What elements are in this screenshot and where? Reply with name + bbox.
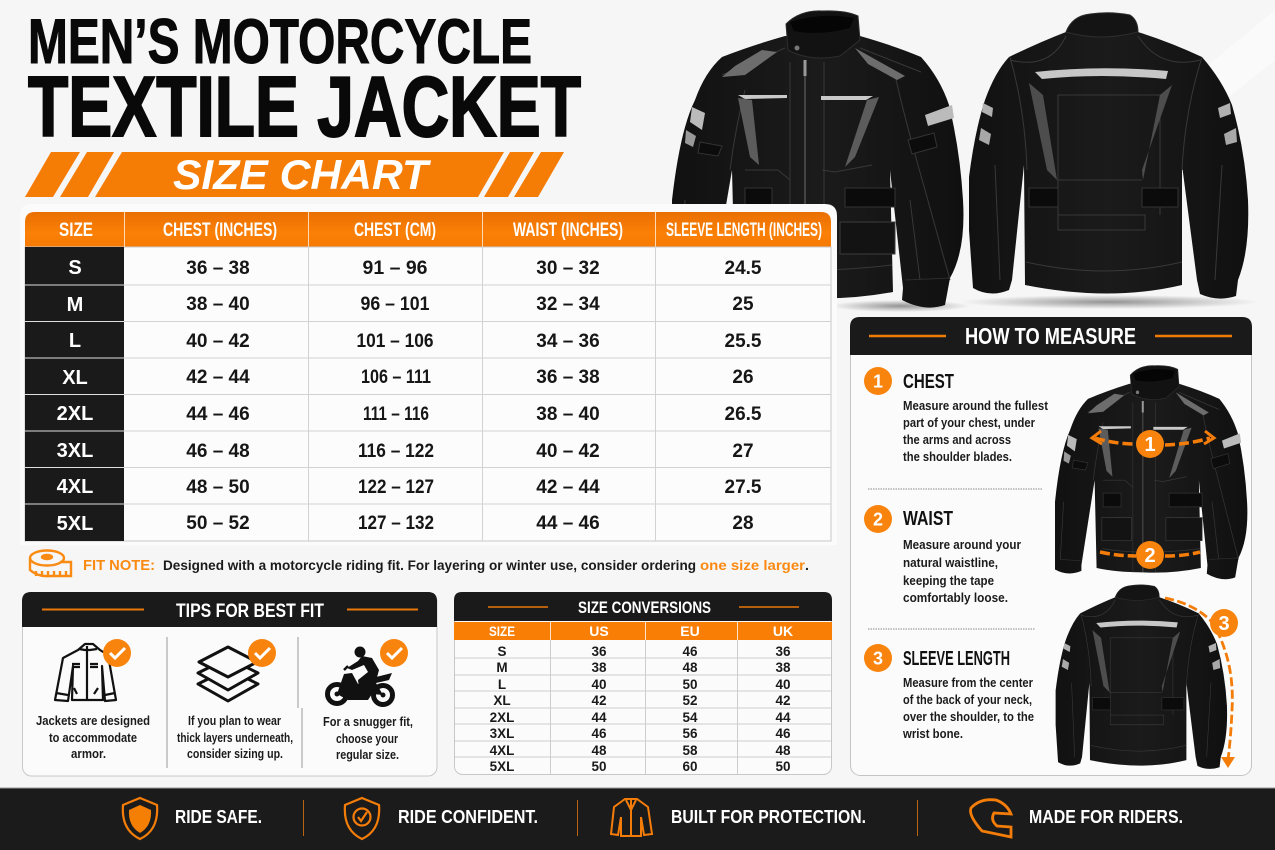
title: MEN’S MOTORCYCLE [28, 7, 532, 77]
conversions rows: 48 [775, 743, 791, 758]
conversions rows: 48 [591, 743, 607, 758]
table rows: 40 – 42 [186, 331, 250, 352]
conversions rows: 60 [682, 759, 698, 774]
table rows: M [67, 294, 83, 316]
icon: jacket [611, 799, 652, 836]
fit note: . [805, 557, 809, 573]
table rows: 2XL [57, 403, 93, 425]
table rows: 38 – 40 [186, 294, 250, 315]
step 1: chest: the shoulder blades. [903, 450, 1012, 464]
table rows: 91 – 96 [362, 258, 428, 279]
arrow: sleeve measurement [1165, 598, 1238, 768]
table rows: 127 – 132 [358, 513, 434, 534]
conversions rows: 46 [775, 726, 791, 741]
photo: jacket front [672, 11, 963, 308]
conversions rows: XL [493, 693, 511, 708]
table rows: 116 – 122 [358, 441, 434, 462]
panel: tips for best fit [22, 592, 437, 776]
conversions rows: 46 [682, 644, 698, 659]
step 2: waist: 2 [873, 510, 883, 530]
conversions column headings: US [589, 623, 609, 639]
fit note: one size larger [700, 557, 806, 573]
tip texts [36, 714, 413, 762]
title: TEXTILE JACKET [28, 60, 581, 155]
conversions rows: 46 [591, 726, 607, 741]
tip texts: to accommodate [49, 731, 137, 745]
table rows: 36 – 38 [536, 367, 600, 388]
photo: small jacket front [1055, 366, 1247, 579]
table rows: 44 – 46 [536, 513, 600, 534]
table rows: 40 – 42 [536, 441, 600, 462]
fit note: FIT NOTE: [83, 557, 155, 574]
table rows: 44 – 46 [186, 404, 250, 425]
table rows: 32 – 34 [536, 294, 600, 315]
fit note: Designed with a motorcycle riding fit. For layering or winter use, consider ordering [163, 557, 696, 573]
conversions rows: M [496, 660, 508, 675]
table rows: S [68, 257, 82, 279]
step 2: waist: WAIST [903, 508, 953, 530]
arrow: chest measurement [1092, 430, 1214, 458]
step 3: sleeve length: SLEEVE LENGTH [903, 648, 1010, 670]
table rows: 122 – 127 [358, 477, 434, 498]
table header: SIZE [59, 220, 93, 241]
label: built for protection: BUILT FOR PROTECTION. [671, 807, 866, 827]
conversions rows: 58 [682, 743, 698, 758]
table header: WAIST (INCHES) [513, 220, 623, 241]
table rows: 34 – 36 [536, 331, 600, 352]
conversions column headings: EU [680, 623, 700, 639]
tip texts: For a snugger fit, [323, 715, 413, 729]
table header [25, 212, 831, 247]
tip texts: Jackets are designed [36, 714, 150, 728]
table rows: 26.5 [725, 404, 762, 425]
conversions rows: 4XL [490, 743, 514, 758]
table rows: 38 – 40 [536, 404, 600, 425]
table header: CHEST (INCHES) [163, 220, 277, 241]
title [28, 7, 581, 155]
step 3: sleeve length: over the shoulder, to the [903, 710, 1034, 724]
table rows: 4XL [57, 476, 93, 498]
conversions rows: 50 [682, 677, 698, 692]
table rows: 25.5 [725, 331, 762, 352]
step 3: sleeve length: 3 [873, 648, 883, 668]
table rows: 27.5 [725, 477, 762, 498]
step 3: sleeve length: Measure from the center [903, 676, 1033, 690]
step 2: waist: keeping the tape [903, 574, 994, 588]
conversions rows: S [497, 644, 507, 659]
icon: jacket outline [55, 644, 116, 701]
photo: small jacket back [1056, 585, 1227, 769]
table rows: 111 – 116 [363, 404, 429, 425]
conversions rows: 36 [775, 644, 791, 659]
table rows: L [69, 330, 81, 352]
banner: size chart: SIZE CHART [173, 151, 431, 198]
conversions column headings: SIZE [489, 623, 515, 639]
conversions rows: 54 [682, 710, 698, 725]
measure header: HOW TO MEASURE [965, 323, 1136, 349]
conversions rows: L [498, 677, 506, 692]
table rows: 26 [732, 367, 754, 388]
conversions rows: 50 [775, 759, 791, 774]
arrow: chest measurement: 1 [1144, 434, 1156, 456]
banner: size chart [25, 151, 564, 198]
step 3: sleeve length: of the back of your neck, [903, 693, 1032, 707]
tip texts: choose your [336, 732, 398, 746]
table rows: 42 – 44 [536, 477, 600, 498]
table grid [25, 247, 831, 541]
label: ride safe: RIDE SAFE. [175, 807, 262, 827]
conversions rows: 2XL [490, 710, 514, 725]
label: ride confident: RIDE CONFIDENT. [398, 807, 538, 827]
photo: jacket back [969, 13, 1248, 299]
step 3: sleeve length: wrist bone. [902, 727, 963, 741]
conversions header [454, 592, 832, 621]
table rows: 101 – 106 [356, 331, 434, 352]
arrow: sleeve measurement: 3 [1218, 613, 1230, 635]
conversions rows: 56 [682, 726, 698, 741]
icon: motorcycle rider [328, 646, 392, 704]
conversions rows: 3XL [490, 726, 514, 741]
step 1: chest: the arms and across [903, 433, 1011, 447]
panel: how to measure [850, 317, 1252, 776]
table rows: 46 – 48 [186, 441, 250, 462]
arrow: waist measurement: 2 [1144, 545, 1156, 567]
conversions rows: 38 [775, 660, 791, 675]
step 1: chest: 1 [873, 372, 883, 392]
table rows: 50 – 52 [186, 513, 250, 534]
table rows: 3XL [57, 440, 93, 462]
conversions rows [490, 644, 791, 774]
conversions rows: 44 [591, 710, 607, 725]
measure header [850, 317, 1252, 355]
footer bar [0, 788, 1275, 850]
step 2: waist: natural waistline, [903, 556, 998, 570]
conversions rows: 36 [591, 644, 607, 659]
conversions rows: 52 [682, 693, 698, 708]
table rows: 25 [732, 294, 754, 315]
arrow: waist measurement [1100, 541, 1200, 569]
panel: main size table [20, 204, 837, 545]
conversions rows: 5XL [490, 759, 514, 774]
conversions rows: 40 [591, 677, 607, 692]
table rows: 28 [732, 513, 754, 534]
step 1: chest [864, 367, 1049, 464]
step 2: waist: comfortably loose. [903, 591, 1008, 605]
conversions rows: 38 [591, 660, 607, 675]
step 1: chest: CHEST [903, 371, 954, 393]
conversions header: SIZE CONVERSIONS [578, 599, 711, 617]
conversions column headings [454, 622, 832, 640]
icon: shield [123, 798, 157, 839]
conversions rows: 50 [591, 759, 607, 774]
table rows: 42 – 44 [186, 367, 250, 388]
step 2: waist [864, 505, 1021, 605]
table rows: 96 – 101 [360, 294, 430, 315]
step 2: waist: Measure around your [903, 538, 1021, 552]
table header: CHEST (CM) [354, 220, 436, 241]
table header: SLEEVE LENGTH (INCHES) [666, 220, 822, 241]
label: made for riders: MADE FOR RIDERS. [1029, 807, 1183, 827]
conversions rows: 42 [591, 693, 607, 708]
tip texts: consider sizing up. [187, 747, 283, 761]
table rows: 30 – 32 [536, 258, 600, 279]
conversions column headings: UK [773, 623, 793, 639]
tip texts: armor. [71, 747, 106, 761]
conversions rows: 48 [682, 660, 698, 675]
icon: helmet [970, 800, 1011, 837]
table rows: 27 [732, 441, 754, 462]
tip texts: thick layers underneath, [177, 731, 293, 745]
tip texts: If you plan to wear [188, 714, 281, 728]
tips header: TIPS FOR BEST FIT [176, 601, 324, 622]
conversions rows: 44 [775, 710, 791, 725]
icon: shield with check [345, 798, 379, 839]
table rows [57, 257, 762, 535]
step 1: chest: part of your chest, under [903, 416, 1035, 430]
table rows: XL [62, 367, 88, 389]
icon: layers [198, 647, 258, 701]
table rows: 106 – 111 [361, 367, 431, 388]
conversions rows: 40 [775, 677, 791, 692]
panel: size conversions [454, 592, 832, 774]
table rows: 36 – 38 [186, 258, 250, 279]
table rows: 24.5 [725, 258, 762, 279]
icon: shadow under jackets [830, 295, 1260, 312]
icon: measuring tape [30, 550, 71, 577]
step 3: sleeve length [864, 644, 1034, 741]
step 1: chest: Measure around the fullest [903, 399, 1049, 413]
icon: check badges [103, 639, 408, 667]
table rows: 48 – 50 [186, 477, 250, 498]
tips header [22, 592, 437, 627]
conversions rows: 42 [775, 693, 791, 708]
table rows: 5XL [57, 513, 93, 535]
tip texts: regular size. [336, 748, 399, 762]
